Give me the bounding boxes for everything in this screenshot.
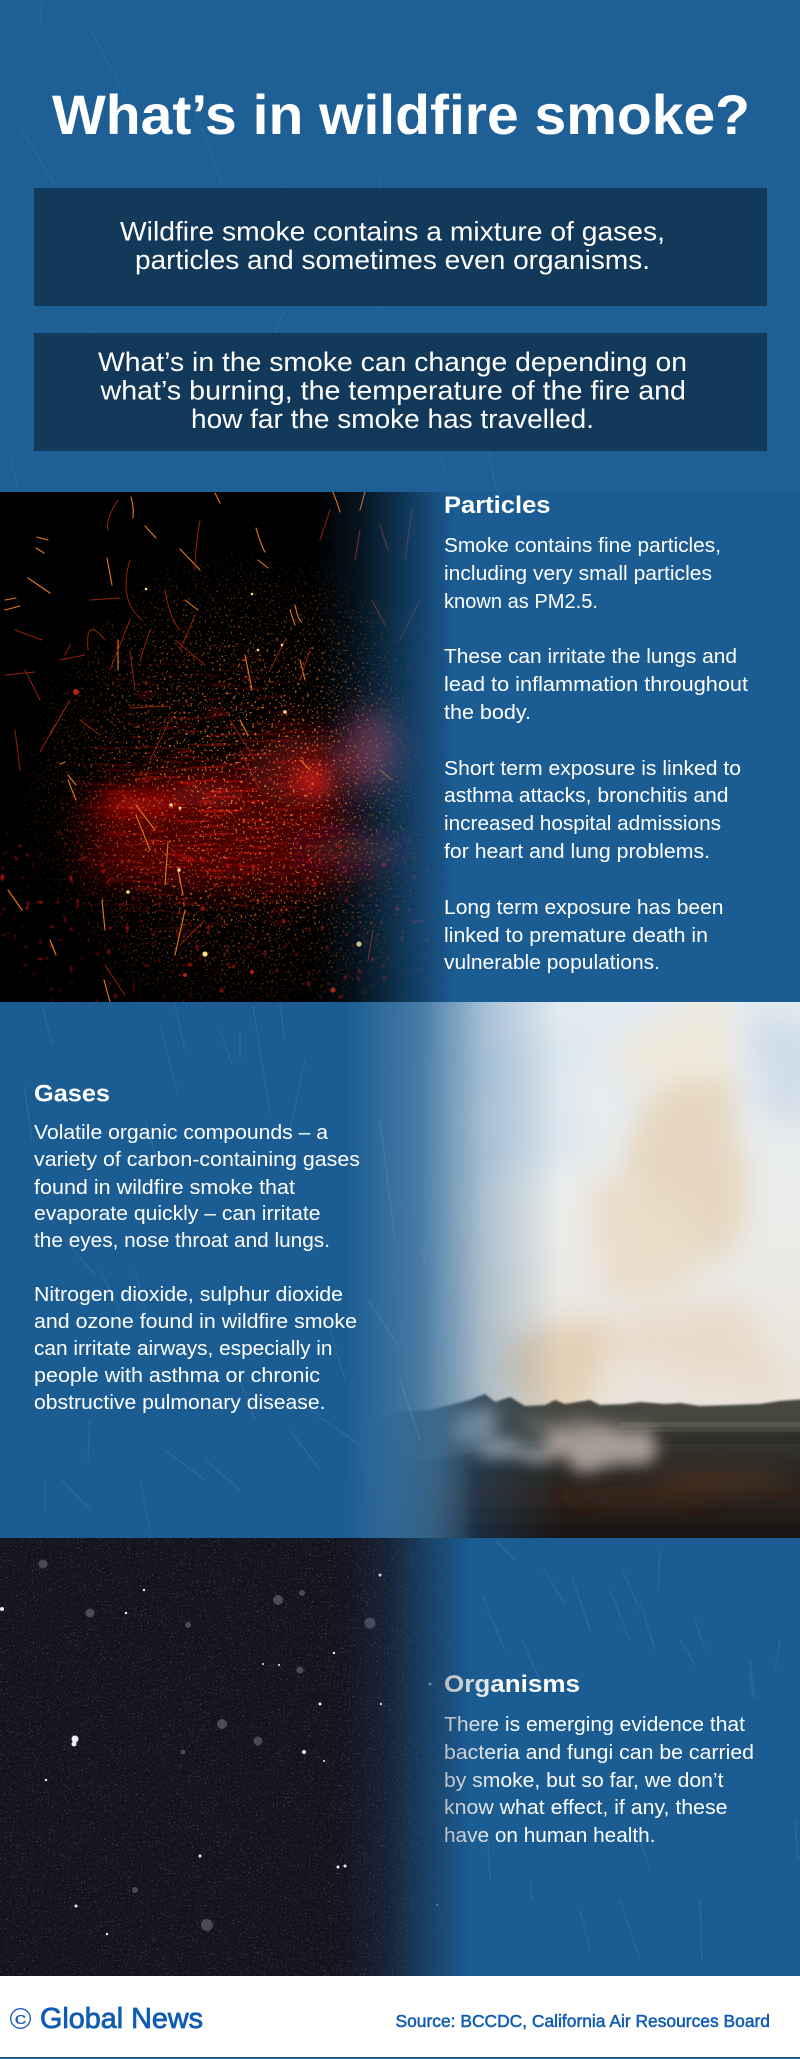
gases text: Volatile organic compounds – a: [34, 1121, 329, 1144]
particles heading: Particles: [444, 492, 550, 519]
intro box 1: [34, 188, 767, 306]
particles text: Long term exposure has been: [444, 896, 724, 919]
gases text: can irritate airways, especially in: [34, 1337, 332, 1360]
icon: Global News logo mark: c: [14, 2009, 27, 2028]
header background streaks: [10, 0, 496, 490]
bright specks: [0, 1574, 438, 1935]
particles text: vulnerable populations.: [444, 951, 660, 974]
ground: [394, 1444, 800, 1538]
particles text: for heart and lung problems.: [444, 840, 710, 863]
orange spark streaks: [5, 492, 392, 1002]
fade to blue: [340, 1002, 550, 1538]
gases text: evaporate quickly – can irritate: [34, 1202, 321, 1225]
organisms text: know what effect, if any, these: [444, 1796, 728, 1819]
particles text: Smoke contains fine particles,: [444, 534, 721, 557]
particles text: increased hospital admissions: [444, 812, 721, 835]
intro box 2: how far the smoke has travelled.: [191, 404, 594, 434]
particles text: the body.: [444, 701, 531, 724]
organisms text: bacteria and fungi can be carried: [444, 1741, 754, 1764]
gases text: the eyes, nose throat and lungs.: [34, 1229, 330, 1252]
title: What’s in wildfire smoke?: [52, 83, 750, 146]
intro box 2: What’s in the smoke can change depending on: [98, 347, 687, 377]
particles text: These can irritate the lungs and: [444, 645, 737, 668]
treeline: [399, 1393, 800, 1464]
intro box 1: Wildfire smoke contains a mixture of gases,: [120, 216, 665, 246]
photo: red sparks: [0, 492, 452, 1002]
organisms heading: Organisms: [444, 1671, 580, 1698]
intro box 2: what’s burning, the temperature of the fire and: [99, 376, 686, 406]
organisms text: [444, 1713, 754, 1847]
organisms text: have on human health.: [444, 1824, 656, 1847]
organisms background streaks: [482, 1540, 798, 1960]
particles text: Short term exposure is linked to: [444, 757, 741, 780]
footer: [0, 1976, 800, 2059]
intro box 1: particles and sometimes even organisms.: [135, 245, 650, 275]
ground smoke: [446, 1409, 658, 1468]
fade to blue: [324, 492, 470, 1002]
particles text: asthma attacks, bronchitis and: [444, 784, 728, 807]
gases background streaks: [24, 1005, 426, 1530]
gases heading: Gases: [34, 1080, 110, 1108]
organisms text: There is emerging evidence that: [444, 1713, 745, 1736]
fade to blue: [359, 1538, 480, 1976]
gases text: variety of carbon-containing gases: [34, 1148, 360, 1171]
gases text: Nitrogen dioxide, sulphur dioxide: [34, 1283, 343, 1306]
red motion streak texture: [54, 640, 364, 979]
particles text: lead to inflammation throughout: [444, 673, 748, 696]
icon: Global News logo mark: [11, 2009, 30, 2028]
intro box 2: [34, 333, 767, 451]
bright hot embers: [126, 588, 362, 957]
lower red ember dots: [0, 726, 440, 1002]
panel: gases: [0, 1002, 800, 1550]
red spark streaks: [5, 500, 420, 995]
panel: organisms: [0, 1538, 800, 1976]
source credit: Source: BCCDC, California Air Resources Board: [396, 2011, 770, 2031]
field and treeline: [394, 1392, 800, 1538]
gases text: people with asthma or chronic: [34, 1364, 320, 1387]
photo: smoke over burning field: [364, 1002, 800, 1538]
Global News wordmark: Global News: [40, 2003, 203, 2035]
gases text: and ozone found in wildfire smoke: [34, 1310, 357, 1333]
particles text: [444, 534, 748, 974]
gases text: obstructive pulmonary disease.: [34, 1391, 326, 1414]
orange ember speckle: [16, 540, 437, 1002]
out of focus spores: [38, 1560, 376, 1931]
panel: particles: [0, 492, 800, 1002]
fine dust speckle: [0, 1538, 480, 1976]
particles text: known as PM2.5.: [444, 590, 598, 613]
gases text: found in wildfire smoke that: [34, 1176, 295, 1199]
photo: dark sky with floating specks: [0, 1538, 466, 1976]
organisms text: by smoke, but so far, we don’t: [444, 1769, 724, 1792]
gases text: [34, 1121, 360, 1414]
particles text: linked to premature death in: [444, 924, 708, 947]
particles text: including very small particles: [444, 562, 712, 585]
